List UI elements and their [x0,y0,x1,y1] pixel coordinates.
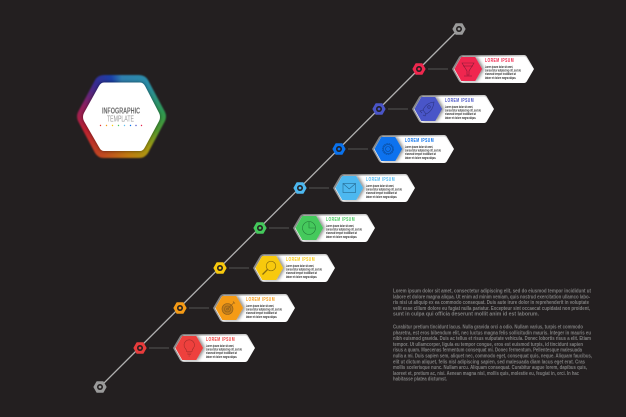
heading: LOREM IPSUM [286,257,315,263]
colored hexagon [415,98,442,120]
icon: magnifier [262,261,276,274]
node [373,104,385,114]
body: eiusmod tempor incididunt ut [366,191,398,195]
card [173,334,255,362]
colored hexagon [336,176,362,200]
body: Lorem ipsum dolor sit amet, [326,224,354,228]
colored hexagon [216,296,242,320]
icon: light bulb [184,340,194,356]
body: consectetur adipiscing elit, sed do [206,348,242,352]
node [294,183,306,193]
body: consectetur adipiscing elit, sed do [246,308,282,312]
body: labore et dolore magna aliqua. [485,76,516,80]
rainbow hexagon frame [76,74,167,159]
icon: envelope [343,184,356,192]
body [405,145,441,160]
heading: LOREM IPSUM [326,217,355,223]
body: consectetur adipiscing elit, sed do [286,268,322,272]
colored hexagon [375,138,402,160]
diagonal timeline line [100,29,459,387]
body: Lorem ipsum dolor sit amet, [366,184,394,188]
body: Lorem ipsum dolor sit amet, [405,145,433,149]
timeline end node: bottom [94,382,106,392]
step 7: target (orange) [174,294,295,322]
body: labore et dolore magna aliqua. [286,275,317,279]
heading: LOREM IPSUM [366,177,395,183]
step 4: envelope (light blue) [294,174,415,202]
paragraph block: sunt in culpa qui officia deserunt mollit anim id est laborum. [393,312,539,318]
body: consectetur adipiscing elit, sed do [326,228,362,232]
icon: gear [382,144,394,154]
body [445,105,481,120]
body: eiusmod tempor incididunt ut [485,72,517,76]
card [293,214,375,242]
colored hexagon [296,216,322,240]
body: consectetur adipiscing elit, sed do [405,149,441,153]
body: labore et dolore magna aliqua. [246,315,277,319]
card [253,254,335,282]
body: consectetur adipiscing elit, sed do [445,109,481,113]
card [372,135,454,163]
colored dots [100,125,142,126]
subtitle text: TEMPLATE [107,114,134,124]
body: eiusmod tempor incididunt ut [206,351,238,355]
node [333,144,345,154]
paragraph block: habitasse platea dictumst. [393,377,447,383]
body: Lorem ipsum dolor sit amet, [246,304,274,308]
body [286,264,322,279]
body: labore et dolore magna aliqua. [206,355,237,359]
body [326,224,362,239]
body: labore et dolore magna aliqua. [405,156,436,160]
step 2: rocket (purple) [373,95,494,123]
step 8: light bulb (red) [134,334,255,362]
body: labore et dolore magna aliqua. [366,195,397,199]
body [485,65,521,80]
step 5: pie chart (green) [254,214,375,242]
card [452,55,534,83]
timeline end node: top [453,24,465,34]
node [174,303,186,313]
colored hexagon [256,256,282,280]
body: consectetur adipiscing elit, sed do [366,188,402,192]
body: consectetur adipiscing elit, sed do [485,69,521,73]
node [254,223,266,233]
icon: target [222,302,235,314]
heading: LOREM IPSUM [405,138,434,144]
card [412,95,494,123]
paragraph block [393,288,592,383]
body: eiusmod tempor incididunt ut [286,271,318,275]
body [206,344,242,359]
body: Lorem ipsum dolor sit amet, [445,105,473,109]
step 1: trophy (pink) [413,55,534,83]
node [413,64,425,74]
card [213,294,295,322]
colored hexagon [176,336,202,360]
step 6: magnifier (yellow) [214,254,335,282]
body: labore et dolore magna aliqua. [445,116,476,120]
title hexagon [83,82,160,151]
icon: trophy [462,63,474,76]
body: Lorem ipsum dolor sit amet, [485,65,513,69]
title text: INFOGRAPHIC [102,106,140,116]
colored hexagon [455,58,482,80]
icon: pie chart [302,222,316,234]
heading: LOREM IPSUM [485,58,514,64]
node [214,263,226,273]
node [134,343,146,353]
icon: rocket [420,102,434,116]
body: eiusmod tempor incididunt ut [326,231,358,235]
body: labore et dolore magna aliqua. [326,235,357,239]
heading: LOREM IPSUM [206,337,235,343]
heading: LOREM IPSUM [246,297,275,303]
heading: LOREM IPSUM [445,98,474,104]
body: Lorem ipsum dolor sit amet, [206,344,234,348]
body [246,304,282,319]
body: eiusmod tempor incididunt ut [445,112,477,116]
card [333,174,415,202]
body: eiusmod tempor incididunt ut [246,311,278,315]
body: eiusmod tempor incididunt ut [405,152,437,156]
step 3: gear (blue) [333,135,454,163]
body [366,184,402,199]
body: Lorem ipsum dolor sit amet, [286,264,314,268]
